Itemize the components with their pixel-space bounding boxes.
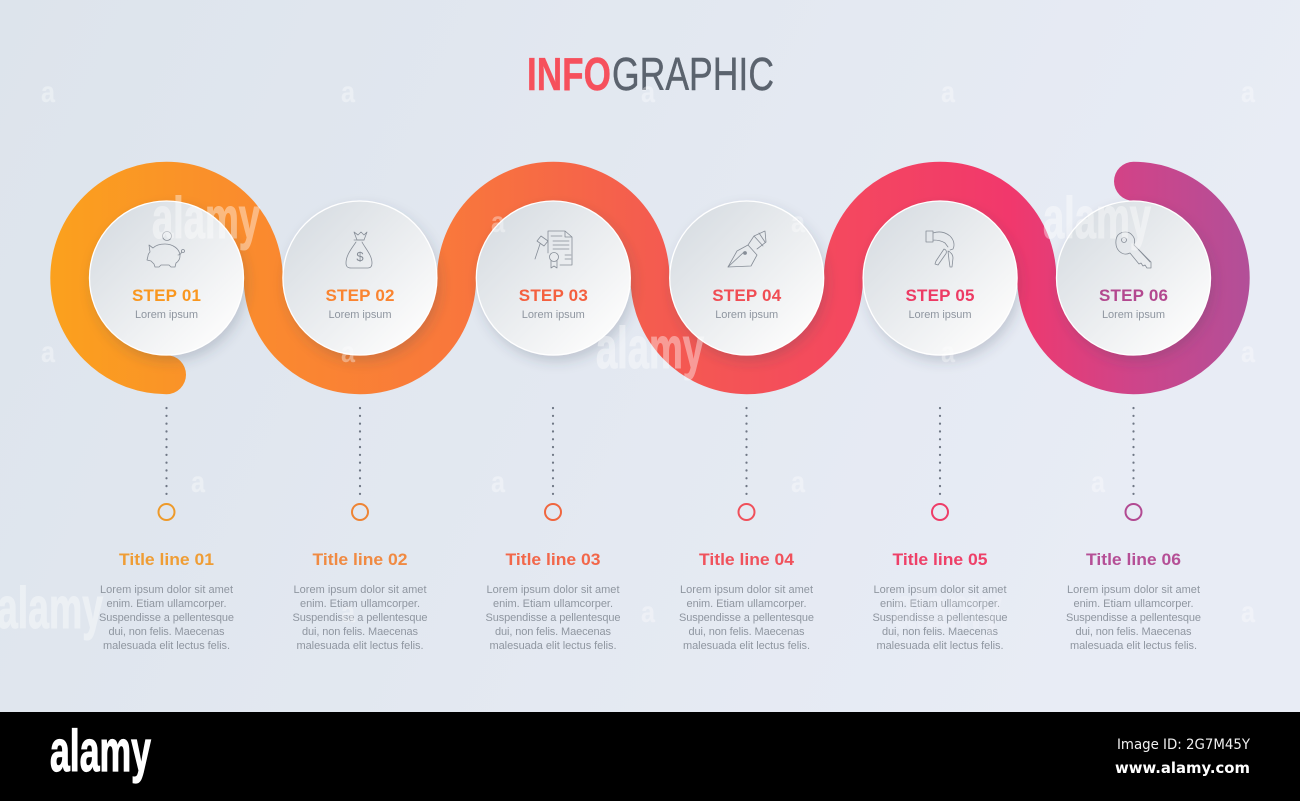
column 02: connector and text: malesuada elit lectus felis. — [296, 640, 424, 652]
column 03: connector and text: Lorem ipsum dolor sit amet — [486, 584, 620, 596]
stock-photo watermarks: a — [341, 336, 355, 369]
stock-photo watermarks: a — [1241, 596, 1255, 629]
column 06: connector and text: Lorem ipsum dolor sit amet — [1067, 584, 1200, 596]
column 03: connector and text — [486, 408, 620, 652]
column 02: connector and text: Suspendisse a pellentesque — [292, 612, 428, 624]
icon: piggy bank — [147, 232, 184, 267]
column 04: connector and text — [679, 408, 814, 652]
column 04: connector and text: enim. Etiam ullamcorper. — [686, 598, 806, 610]
column 02: connector and text: enim. Etiam ullamcorper. — [300, 598, 420, 610]
step 06 card: Lorem ipsum — [1102, 309, 1165, 321]
title: INFO — [527, 48, 611, 100]
step 03 card: Lorem ipsum — [522, 309, 585, 321]
column 05: connector and text: dui, non felis. Maecenas — [882, 626, 998, 638]
column 03: connector and text: malesuada elit lectus felis. — [490, 640, 616, 652]
stock-photo watermarks: a — [341, 596, 355, 629]
step 06 card — [1056, 201, 1210, 355]
stock-photo watermarks: alamy — [152, 186, 260, 251]
stock-photo watermarks: a — [1241, 76, 1255, 109]
column 05: connector and text: enim. Etiam ullamcorper. — [880, 598, 1000, 610]
step 02 card — [283, 201, 437, 355]
title — [527, 48, 774, 100]
stock-photo watermarks: a — [791, 466, 805, 499]
column 06: connector and text: Suspendisse a pellentesque — [1066, 612, 1201, 624]
stock-photo watermarks: a — [1091, 466, 1105, 499]
stock-photo watermarks: a — [191, 466, 205, 499]
column 04: connector and text: Suspendisse a pellentesque — [679, 612, 814, 624]
column 05: connector and text: Lorem ipsum dolor sit amet — [874, 584, 1006, 596]
column 05: connector and text: malesuada elit lectus felis. — [876, 640, 1004, 652]
column 04: connector and text: malesuada elit lectus felis. — [683, 640, 810, 652]
icon: hand holding keys — [926, 231, 954, 267]
column 04: connector and text: dui, non felis. Maecenas — [688, 626, 805, 638]
column 05: connector and text: Title line 05 — [892, 550, 988, 569]
stock-photo watermarks: a — [941, 336, 955, 369]
column 04: connector and text: Lorem ipsum dolor sit amet — [680, 584, 813, 596]
column 02: connector and text: dui, non felis. Maecenas — [302, 626, 418, 638]
column 06: connector and text — [1066, 408, 1201, 652]
column 02: connector and text — [292, 408, 428, 652]
column 05: connector and text — [872, 408, 1008, 652]
icon: key — [1116, 232, 1151, 268]
step 03 card — [476, 201, 630, 355]
column 06: connector and text: Title line 06 — [1086, 550, 1181, 569]
column 06: connector and text: malesuada elit lectus felis. — [1070, 640, 1197, 652]
column 03: connector and text: Title line 03 — [506, 550, 600, 569]
column 06: connector and text: enim. Etiam ullamcorper. — [1074, 598, 1194, 610]
stock-photo watermarks: a — [941, 76, 955, 109]
stock-photo watermarks: a — [491, 466, 505, 499]
step 02 card: Lorem ipsum — [328, 309, 392, 321]
column 01: connector and text: Title line 01 — [119, 550, 214, 569]
column 01: connector and text: Lorem ipsum dolor sit amet — [100, 584, 233, 596]
icon: money bag — [346, 232, 372, 268]
stock-photo watermarks: a — [791, 206, 805, 239]
step 01 card — [90, 201, 244, 355]
column 01: connector and text: dui, non felis. Maecenas — [108, 626, 225, 638]
stock-photo watermarks: a — [41, 76, 55, 109]
icon: pen nib — [728, 231, 766, 267]
step 05 card — [863, 201, 1017, 355]
stock-photo watermarks: a — [491, 206, 505, 239]
stock-photo watermarks: a — [341, 76, 355, 109]
stock-photo watermarks: a — [1241, 336, 1255, 369]
column 01: connector and text: malesuada elit lectus felis. — [103, 640, 230, 652]
column 03: connector and text: Suspendisse a pellentesque — [486, 612, 620, 624]
stock-photo watermarks: alamy — [0, 576, 103, 641]
stock-photo watermarks: alamy — [596, 316, 704, 381]
column 05: connector and text: Suspendisse a pellentesque — [872, 612, 1008, 624]
stock-photo watermarks: a — [641, 76, 655, 109]
stock-photo watermarks: a — [41, 336, 55, 369]
stock-photo watermarks — [0, 76, 1255, 641]
step 01 card: STEP 01 — [132, 286, 201, 305]
title: GRAPHIC — [612, 48, 774, 100]
column 01: connector and text: Suspendisse a pellentesque — [99, 612, 234, 624]
step 04 card: Lorem ipsum — [715, 309, 778, 321]
step 06 card: STEP 06 — [1099, 286, 1168, 305]
icon: gavel and certificate — [535, 231, 572, 268]
column 02: connector and text: Title line 02 — [312, 550, 408, 569]
footer logo: alamy — [50, 719, 151, 784]
step 01 card: Lorem ipsum — [135, 309, 198, 321]
column 03: connector and text: dui, non felis. Maecenas — [495, 626, 612, 638]
step 04 card: STEP 04 — [712, 286, 782, 305]
step 05 card: STEP 05 — [906, 286, 974, 305]
column 01: connector and text: enim. Etiam ullamcorper. — [106, 598, 226, 610]
column 06: connector and text: dui, non felis. Maecenas — [1076, 626, 1192, 638]
column 04: connector and text: Title line 04 — [699, 550, 795, 569]
column 01: connector and text — [99, 408, 234, 652]
website: www.alamy.com — [1115, 759, 1250, 777]
step 04 card — [670, 201, 824, 355]
step 02 card: STEP 02 — [326, 286, 394, 305]
stock-photo watermarks: alamy — [894, 576, 1002, 641]
step 05 card: Lorem ipsum — [908, 309, 972, 321]
stock-photo watermarks: a — [641, 596, 655, 629]
image id: Image ID: 2G7M45Y — [1117, 737, 1250, 753]
footer bar — [0, 712, 1300, 801]
column 03: connector and text: enim. Etiam ullamcorper. — [493, 598, 613, 610]
column 02: connector and text: Lorem ipsum dolor sit amet — [294, 584, 426, 596]
icon: money bag: $ — [356, 249, 364, 264]
stock-photo watermarks: alamy — [1043, 186, 1151, 251]
wavy gradient ribbon — [70, 181, 1230, 375]
step 03 card: STEP 03 — [519, 286, 588, 305]
